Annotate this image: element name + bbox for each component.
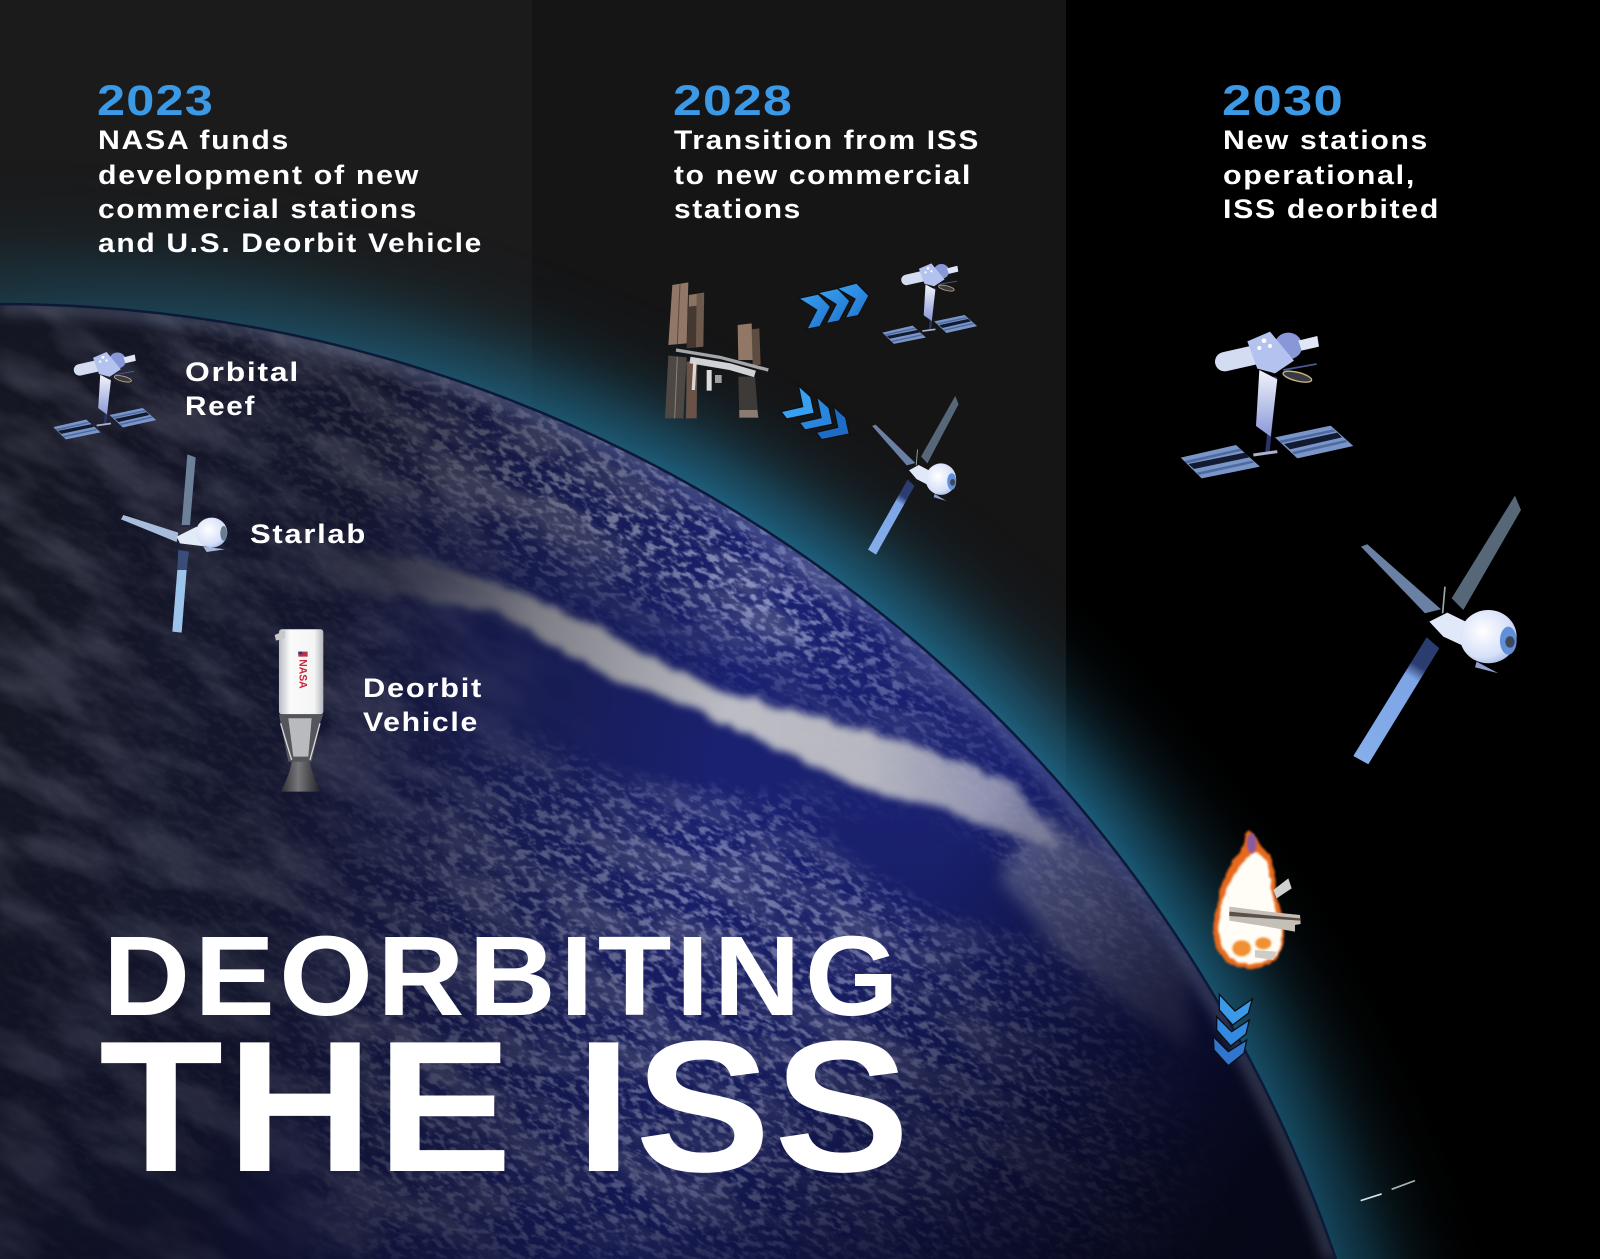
description 2028: to new commercial: [674, 160, 972, 190]
label: Deorbit Vehicle: Vehicle: [363, 707, 479, 737]
icon: Orbital Reef medium: [882, 263, 977, 344]
title: [99, 913, 913, 1211]
description 2030: New stations: [1223, 125, 1429, 155]
description 2030: ISS deorbited: [1223, 194, 1440, 224]
arrow: chevrons to Orbital Reef: [798, 283, 869, 329]
description 2023: [98, 125, 483, 258]
label: Deorbit Vehicle: Deorbit: [363, 673, 483, 703]
label: Starlab: Starlab: [250, 519, 367, 549]
icon: ISS burning: [1213, 830, 1301, 969]
description 2030: [1223, 125, 1440, 224]
description 2030: operational,: [1223, 160, 1416, 190]
title: THE ISS: [99, 1002, 913, 1211]
year 2030: 2030: [1222, 77, 1344, 125]
year 2023: 2023: [97, 77, 214, 125]
arrow: chevrons to Starlab: [781, 386, 849, 440]
description 2028: Transition from ISS: [674, 125, 980, 155]
icon: Orbital Reef small: [53, 352, 156, 439]
icon: ISS: [665, 282, 768, 418]
description 2023: NASA funds: [98, 125, 290, 155]
title: DEORBITING: [103, 913, 903, 1039]
panel: 2023 text: [97, 77, 483, 258]
icon: Starlab small: [121, 454, 227, 633]
description 2023: development of new: [98, 160, 420, 190]
icon: Starlab large: [1353, 496, 1521, 764]
icon: Starlab medium: [868, 396, 959, 555]
earth: [0, 305, 1334, 1259]
icon: Orbital Reef large: [1181, 332, 1353, 478]
description 2023: commercial stations: [98, 194, 418, 224]
label: Orbital Reef: Orbital: [185, 357, 300, 387]
panel: 2030 text: [1222, 77, 1440, 224]
label: Orbital Reef: Reef: [185, 391, 256, 421]
description 2028: stations: [674, 194, 802, 224]
panel: 2028 text: [673, 77, 980, 224]
label: Deorbit Vehicle: [363, 673, 483, 737]
description 2023: and U.S. Deorbit Vehicle: [98, 228, 483, 258]
icon: debris streaks: [1361, 1181, 1415, 1201]
atmosphere glow: [0, 234, 1440, 1259]
description 2028: [674, 125, 980, 224]
arrow: chevrons downward: [1213, 994, 1252, 1066]
icon: Deorbit Vehicle: NASA: [296, 659, 308, 689]
label: Orbital Reef: [185, 357, 300, 421]
year 2028: 2028: [673, 77, 793, 125]
icon: Deorbit Vehicle: [275, 629, 323, 792]
earth limb line: [0, 304, 1336, 1259]
